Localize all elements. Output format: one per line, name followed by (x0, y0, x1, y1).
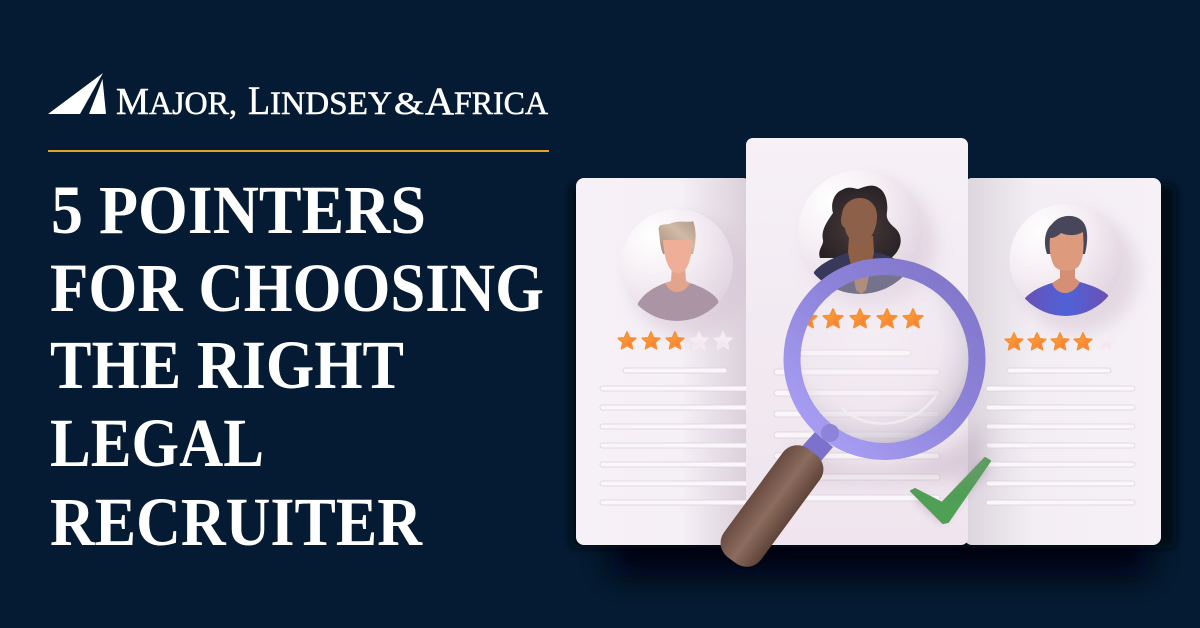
magnifier shadow on card (790, 420, 985, 480)
panel: left resume card (576, 178, 760, 545)
headline: 5 POINTERS (51, 172, 426, 248)
magnifier handle (713, 438, 831, 574)
ring joint (821, 424, 839, 442)
panel: right resume card (964, 178, 1161, 545)
gold divider (48, 150, 549, 152)
headline: RECRUITER (50, 484, 423, 560)
infographic canvas (48, 73, 1180, 590)
centre avatar (808, 180, 939, 306)
right avatar (1010, 204, 1138, 333)
icon: magnifying glass (713, 266, 985, 574)
magnifier ring (792, 266, 977, 452)
headline: LEGAL (50, 405, 264, 481)
logo (48, 73, 548, 123)
headline: FOR CHOOSING (50, 250, 544, 326)
headline (50, 172, 544, 560)
left text lines (600, 368, 760, 505)
magnifier lens (800, 274, 970, 444)
logo wordmark: L (248, 78, 270, 123)
logo mark: sails (48, 73, 106, 114)
panel: centre resume card (746, 138, 968, 545)
headline: THE RIGHT (50, 327, 404, 403)
lens highlight arc (843, 397, 935, 424)
logo wordmark: FRICA (454, 86, 548, 122)
icon: check mark (911, 458, 990, 523)
centre text lines (774, 350, 940, 501)
left star rating (618, 332, 732, 349)
logo wordmark: AJOR, (149, 86, 237, 122)
logo wordmark (116, 78, 548, 123)
left avatar (626, 220, 740, 341)
logo wordmark: A (425, 80, 454, 123)
right text lines (986, 368, 1135, 505)
logo wordmark: M (116, 81, 149, 123)
logo wordmark: & (394, 85, 424, 121)
right star rating (1005, 333, 1115, 350)
drop shadow below cards (570, 184, 1176, 575)
centre star rating (797, 309, 923, 327)
logo wordmark: INDSEY (270, 86, 392, 122)
magnifier neck (797, 432, 833, 468)
